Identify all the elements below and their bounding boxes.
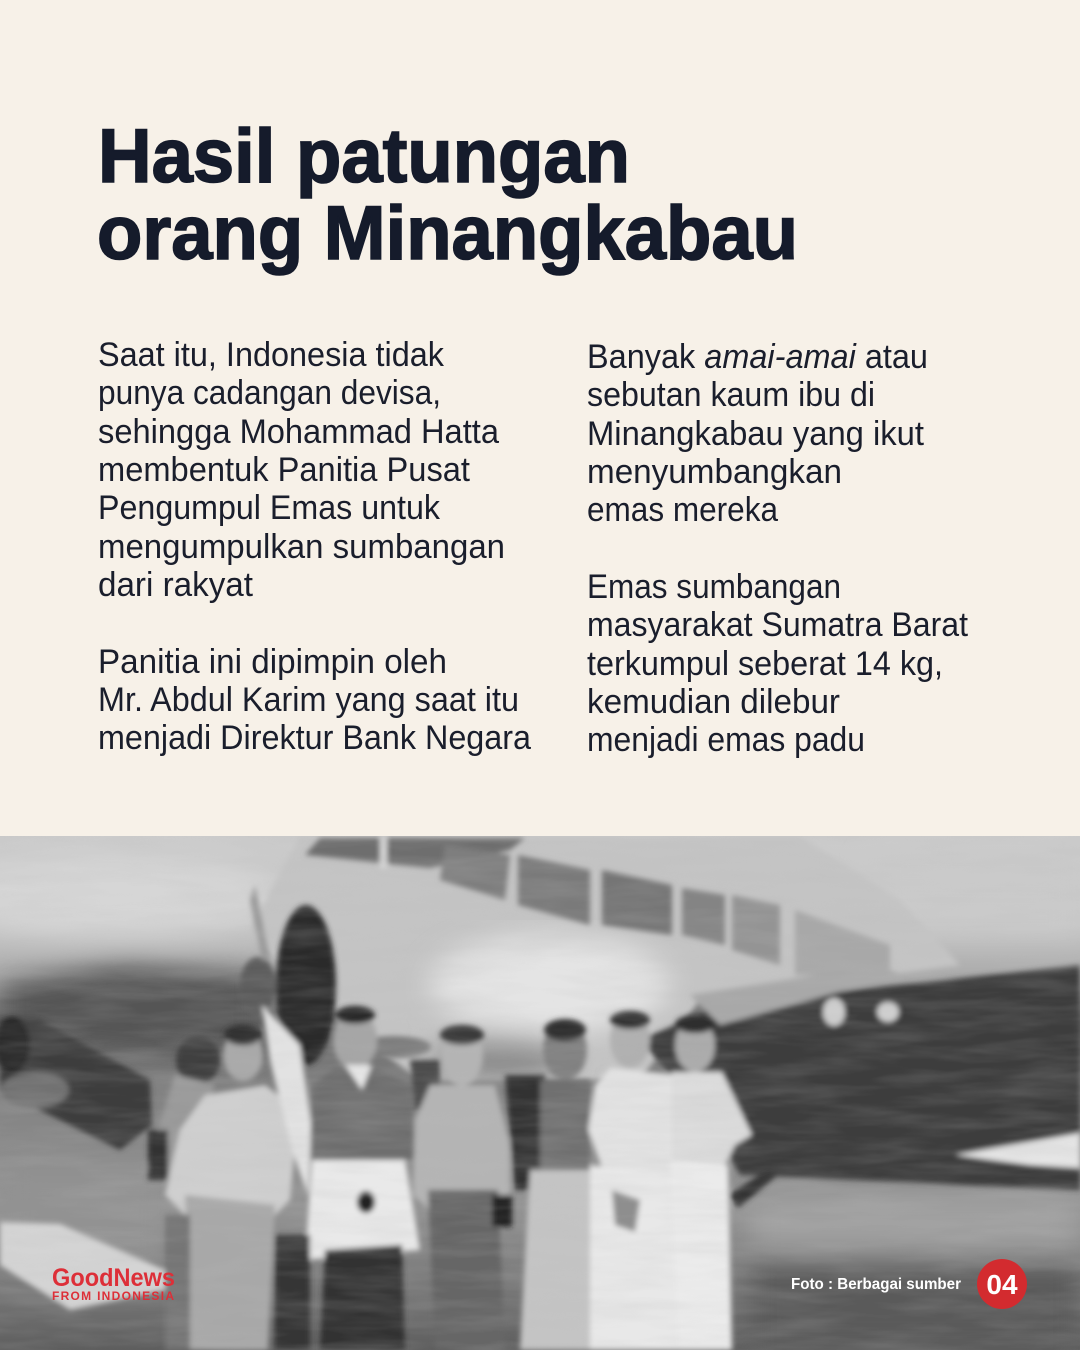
person: man 1 [223, 1029, 263, 1081]
propeller blade [262, 1005, 312, 1195]
title: orang Minangkabau [97, 191, 798, 276]
logo: GoodNews From Indonesia: GoodNews [52, 1264, 175, 1292]
text block: left column paragraph 2: Panitia ini dipimpin oleh [98, 643, 447, 681]
text block: right column paragraph 1 [587, 338, 928, 529]
person: man 5 [610, 1012, 650, 1068]
fuselage [264, 882, 957, 1082]
text block: right column paragraph 2: Emas sumbangan [587, 568, 841, 606]
text block: right column paragraph 1: sebutan kaum ibu di [587, 376, 875, 414]
page number badge [977, 1259, 1027, 1309]
person: man 6 [675, 1018, 715, 1072]
dark gap behind the group [410, 1060, 440, 1110]
logo: GoodNews From Indonesia [52, 1264, 175, 1303]
person: man behind left [176, 1036, 220, 1084]
person: woman [438, 1038, 484, 1087]
text block: left column paragraph 1: sehingga Mohammad Hatta [98, 413, 499, 451]
text block: right column paragraph 2: menjadi emas padu [587, 721, 865, 759]
person: man 2 [333, 1010, 377, 1070]
text block: right column paragraph 2: masyarakat Sumatra Barat [587, 606, 969, 644]
text block: left column paragraph 1: mengumpulkan sumbangan [98, 528, 505, 566]
title: Hasil patungan [98, 114, 630, 199]
text block: left column paragraph 1: dari rakyat [98, 566, 254, 604]
text block: left column paragraph 1: membentuk Panitia Pusat [98, 451, 471, 489]
text block: right column paragraph 1: emas mereka [587, 491, 778, 529]
text block: left column paragraph 2: Mr. Abdul Karim yang saat itu [98, 681, 519, 719]
propeller [276, 905, 336, 1065]
right wing [640, 965, 1080, 1190]
text block: left column paragraph 2: menjadi Direktur Bank Negara [98, 719, 531, 757]
text block: left column paragraph 1: Saat itu, Indonesia tidak [98, 336, 445, 374]
photo: group in front of airplane [0, 836, 1080, 1350]
text block: right column paragraph 2: kemudian dilebur [587, 683, 840, 721]
photo credit: Foto : Berbagai sumber [791, 1276, 961, 1293]
text block: right column paragraph 1: Minangkabau yang ikut [587, 415, 925, 453]
left engine and wing [0, 1020, 152, 1150]
text block: right column paragraph 1: menyumbangkan [587, 453, 842, 491]
title [97, 114, 798, 276]
person: man 4 [541, 1034, 590, 1081]
text block: left column paragraph 1 [98, 336, 505, 604]
text block: right column paragraph 2 [587, 568, 969, 759]
page number badge: 04 [986, 1269, 1018, 1300]
text block: left column paragraph 1: punya cadangan devisa, [98, 374, 441, 412]
text block: right column paragraph 2: terkumpul seberat 14 kg, [587, 645, 943, 683]
cockpit windows [305, 838, 525, 868]
text block: left column paragraph 1: Pengumpul Emas untuk [98, 489, 441, 527]
logo: GoodNews From Indonesia: FROM INDONESIA [52, 1289, 174, 1303]
text block: left column paragraph 2 [98, 643, 531, 757]
text block: right column paragraph 1: Banyak amai-amai atau [587, 338, 928, 376]
